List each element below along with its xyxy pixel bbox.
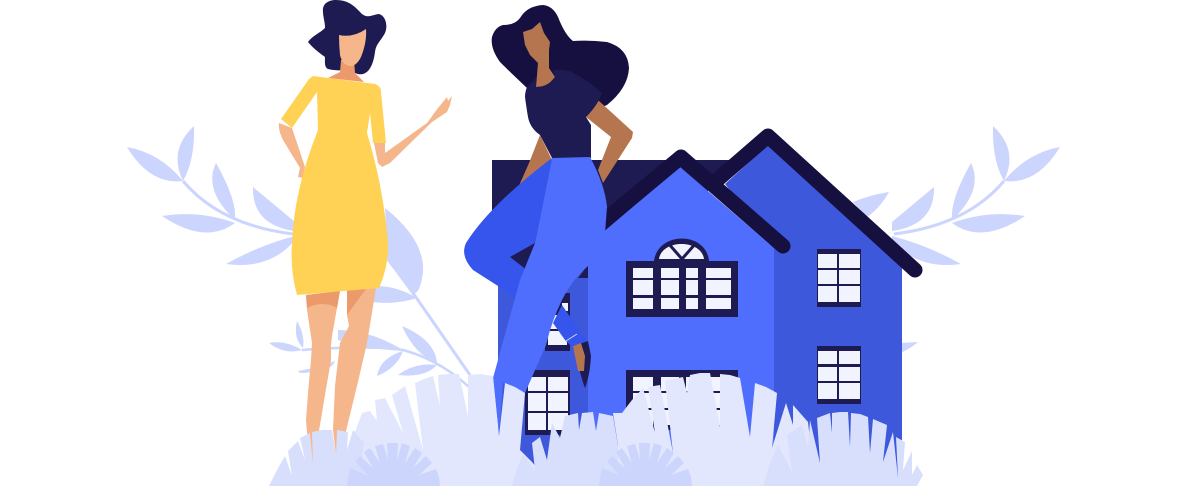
small leaves behind house right (853, 192, 918, 353)
medium shrub left (269, 430, 366, 486)
left arm (518, 135, 552, 188)
trouser cuff line (566, 334, 577, 341)
upper left window (545, 293, 570, 351)
left leaf branch (127, 126, 295, 265)
navy shirt (525, 70, 602, 158)
right house wall (725, 145, 902, 480)
left house wall (498, 240, 593, 480)
right leg (333, 288, 376, 455)
left leg (306, 291, 340, 465)
lower plant (269, 321, 470, 388)
right arm (374, 96, 452, 167)
hair (308, 0, 386, 74)
foot (573, 343, 585, 371)
face and neck (523, 22, 555, 87)
woman in blue trousers (464, 5, 633, 436)
large shrub right (613, 373, 815, 486)
standing trouser leg (493, 157, 607, 436)
right leaf branch (892, 126, 1060, 265)
small shrub centre (599, 443, 692, 486)
shoe (573, 341, 591, 388)
small shrub left (347, 443, 440, 486)
medium shrub centre (512, 412, 625, 486)
large shrub left (352, 374, 552, 486)
central tall plant (372, 208, 470, 375)
neck (328, 60, 364, 82)
lower shin (553, 305, 587, 348)
left arm (279, 123, 305, 178)
front gable roof (598, 157, 783, 246)
lower front window (626, 370, 738, 430)
lower left window (525, 370, 570, 435)
woman in yellow dress (279, 0, 452, 465)
long hair (492, 5, 629, 120)
front house wall (588, 167, 774, 480)
lower right window (817, 346, 861, 404)
shrubs (269, 373, 923, 486)
arched window (626, 238, 738, 317)
thigh shadows (306, 289, 366, 315)
yellow dress (281, 76, 388, 295)
house (492, 136, 915, 480)
face (339, 29, 366, 66)
medium shrub right (763, 412, 923, 486)
back roof block (492, 160, 735, 280)
navy patch beside trouser leg (578, 262, 590, 278)
raised thigh (464, 158, 552, 303)
upper right window (817, 249, 861, 307)
right arm (586, 100, 633, 183)
navy patch behind knee (505, 235, 540, 285)
right gable roof (716, 136, 915, 270)
